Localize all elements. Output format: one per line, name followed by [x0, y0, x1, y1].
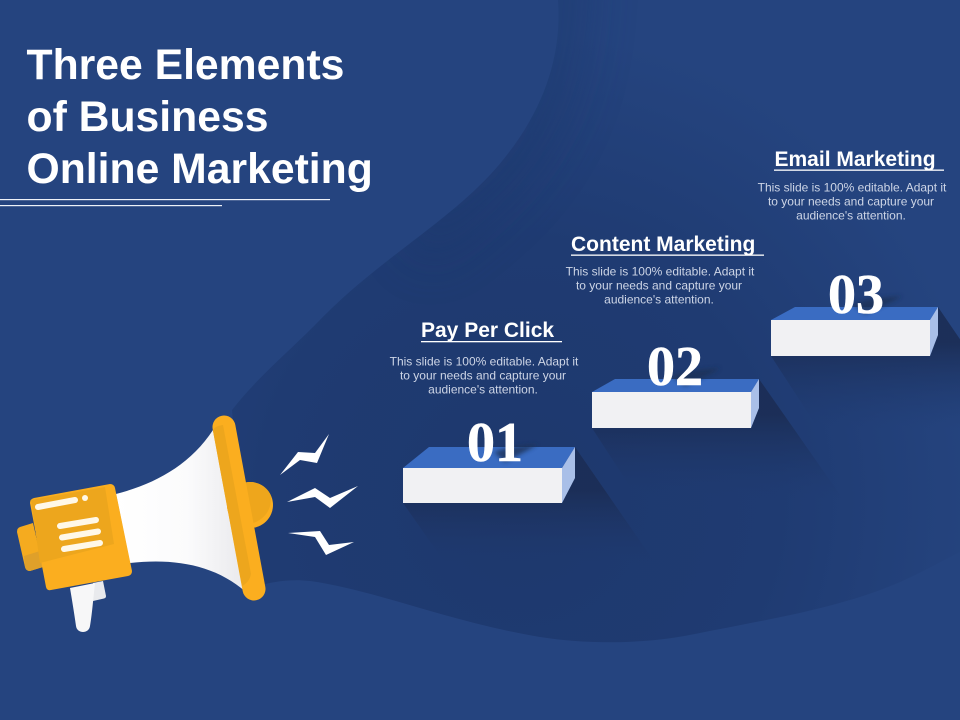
heading: Pay Per Click	[421, 319, 554, 342]
step 3 number shadow	[853, 296, 902, 314]
sound bolts	[280, 434, 358, 555]
body text: This slide is 100% editable. Adapt it	[758, 180, 947, 194]
step 1 number shadow	[494, 444, 538, 462]
title	[26, 41, 373, 193]
text lines on body	[38, 495, 100, 549]
step 2 side	[751, 379, 759, 428]
megaphone horn	[116, 430, 246, 592]
step 2	[592, 336, 845, 502]
step 3 side	[930, 307, 938, 356]
megaphone dome	[227, 482, 273, 528]
body text: This slide is 100% editable. Adapt it	[390, 354, 579, 368]
step 3 top	[771, 307, 938, 320]
heading: Email Marketing	[774, 148, 936, 171]
step 3 shadow	[771, 307, 960, 430]
title: of Business	[26, 93, 268, 141]
step 3	[771, 264, 960, 430]
body text	[758, 180, 947, 222]
body text: audience's attention.	[604, 292, 714, 306]
body text: audience's attention.	[428, 382, 538, 396]
background wave	[232, 50, 858, 642]
megaphone	[17, 425, 273, 632]
step 1 front	[403, 468, 562, 503]
step 2 shadow	[592, 379, 845, 502]
body text	[390, 354, 579, 396]
block: Pay Per Click	[390, 319, 579, 396]
block: Email Marketing	[758, 148, 947, 222]
megaphone body	[30, 484, 132, 590]
step 2 top	[592, 379, 759, 392]
body text: This slide is 100% editable. Adapt it	[566, 264, 755, 278]
step 3 number: 03	[828, 264, 884, 326]
step 2 number shadow	[672, 368, 720, 386]
step 1 shadow	[403, 447, 660, 570]
body text: to your needs and capture your	[576, 278, 742, 292]
body text: to your needs and capture your	[400, 368, 566, 382]
title underlines	[0, 199, 330, 206]
megaphone back knob	[17, 523, 43, 571]
bolt 2	[287, 486, 358, 508]
step 3 front	[771, 320, 930, 356]
step 1 number: 01	[467, 412, 523, 474]
step 2 front	[592, 392, 751, 428]
title: Online Marketing	[26, 145, 373, 193]
megaphone rim	[213, 425, 254, 589]
megaphone handle	[70, 581, 106, 632]
title: Three Elements	[26, 41, 344, 89]
step 1	[403, 412, 660, 570]
body text	[566, 264, 755, 306]
bolt 1	[280, 434, 329, 475]
heading: Content Marketing	[571, 233, 755, 256]
bolt 3	[288, 531, 354, 555]
body text: audience's attention.	[796, 208, 906, 222]
step 1 side	[562, 447, 575, 503]
step 1 top	[403, 447, 575, 468]
step 2 number: 02	[647, 336, 703, 398]
block: Content Marketing	[566, 233, 764, 306]
body text: to your needs and capture your	[768, 194, 934, 208]
